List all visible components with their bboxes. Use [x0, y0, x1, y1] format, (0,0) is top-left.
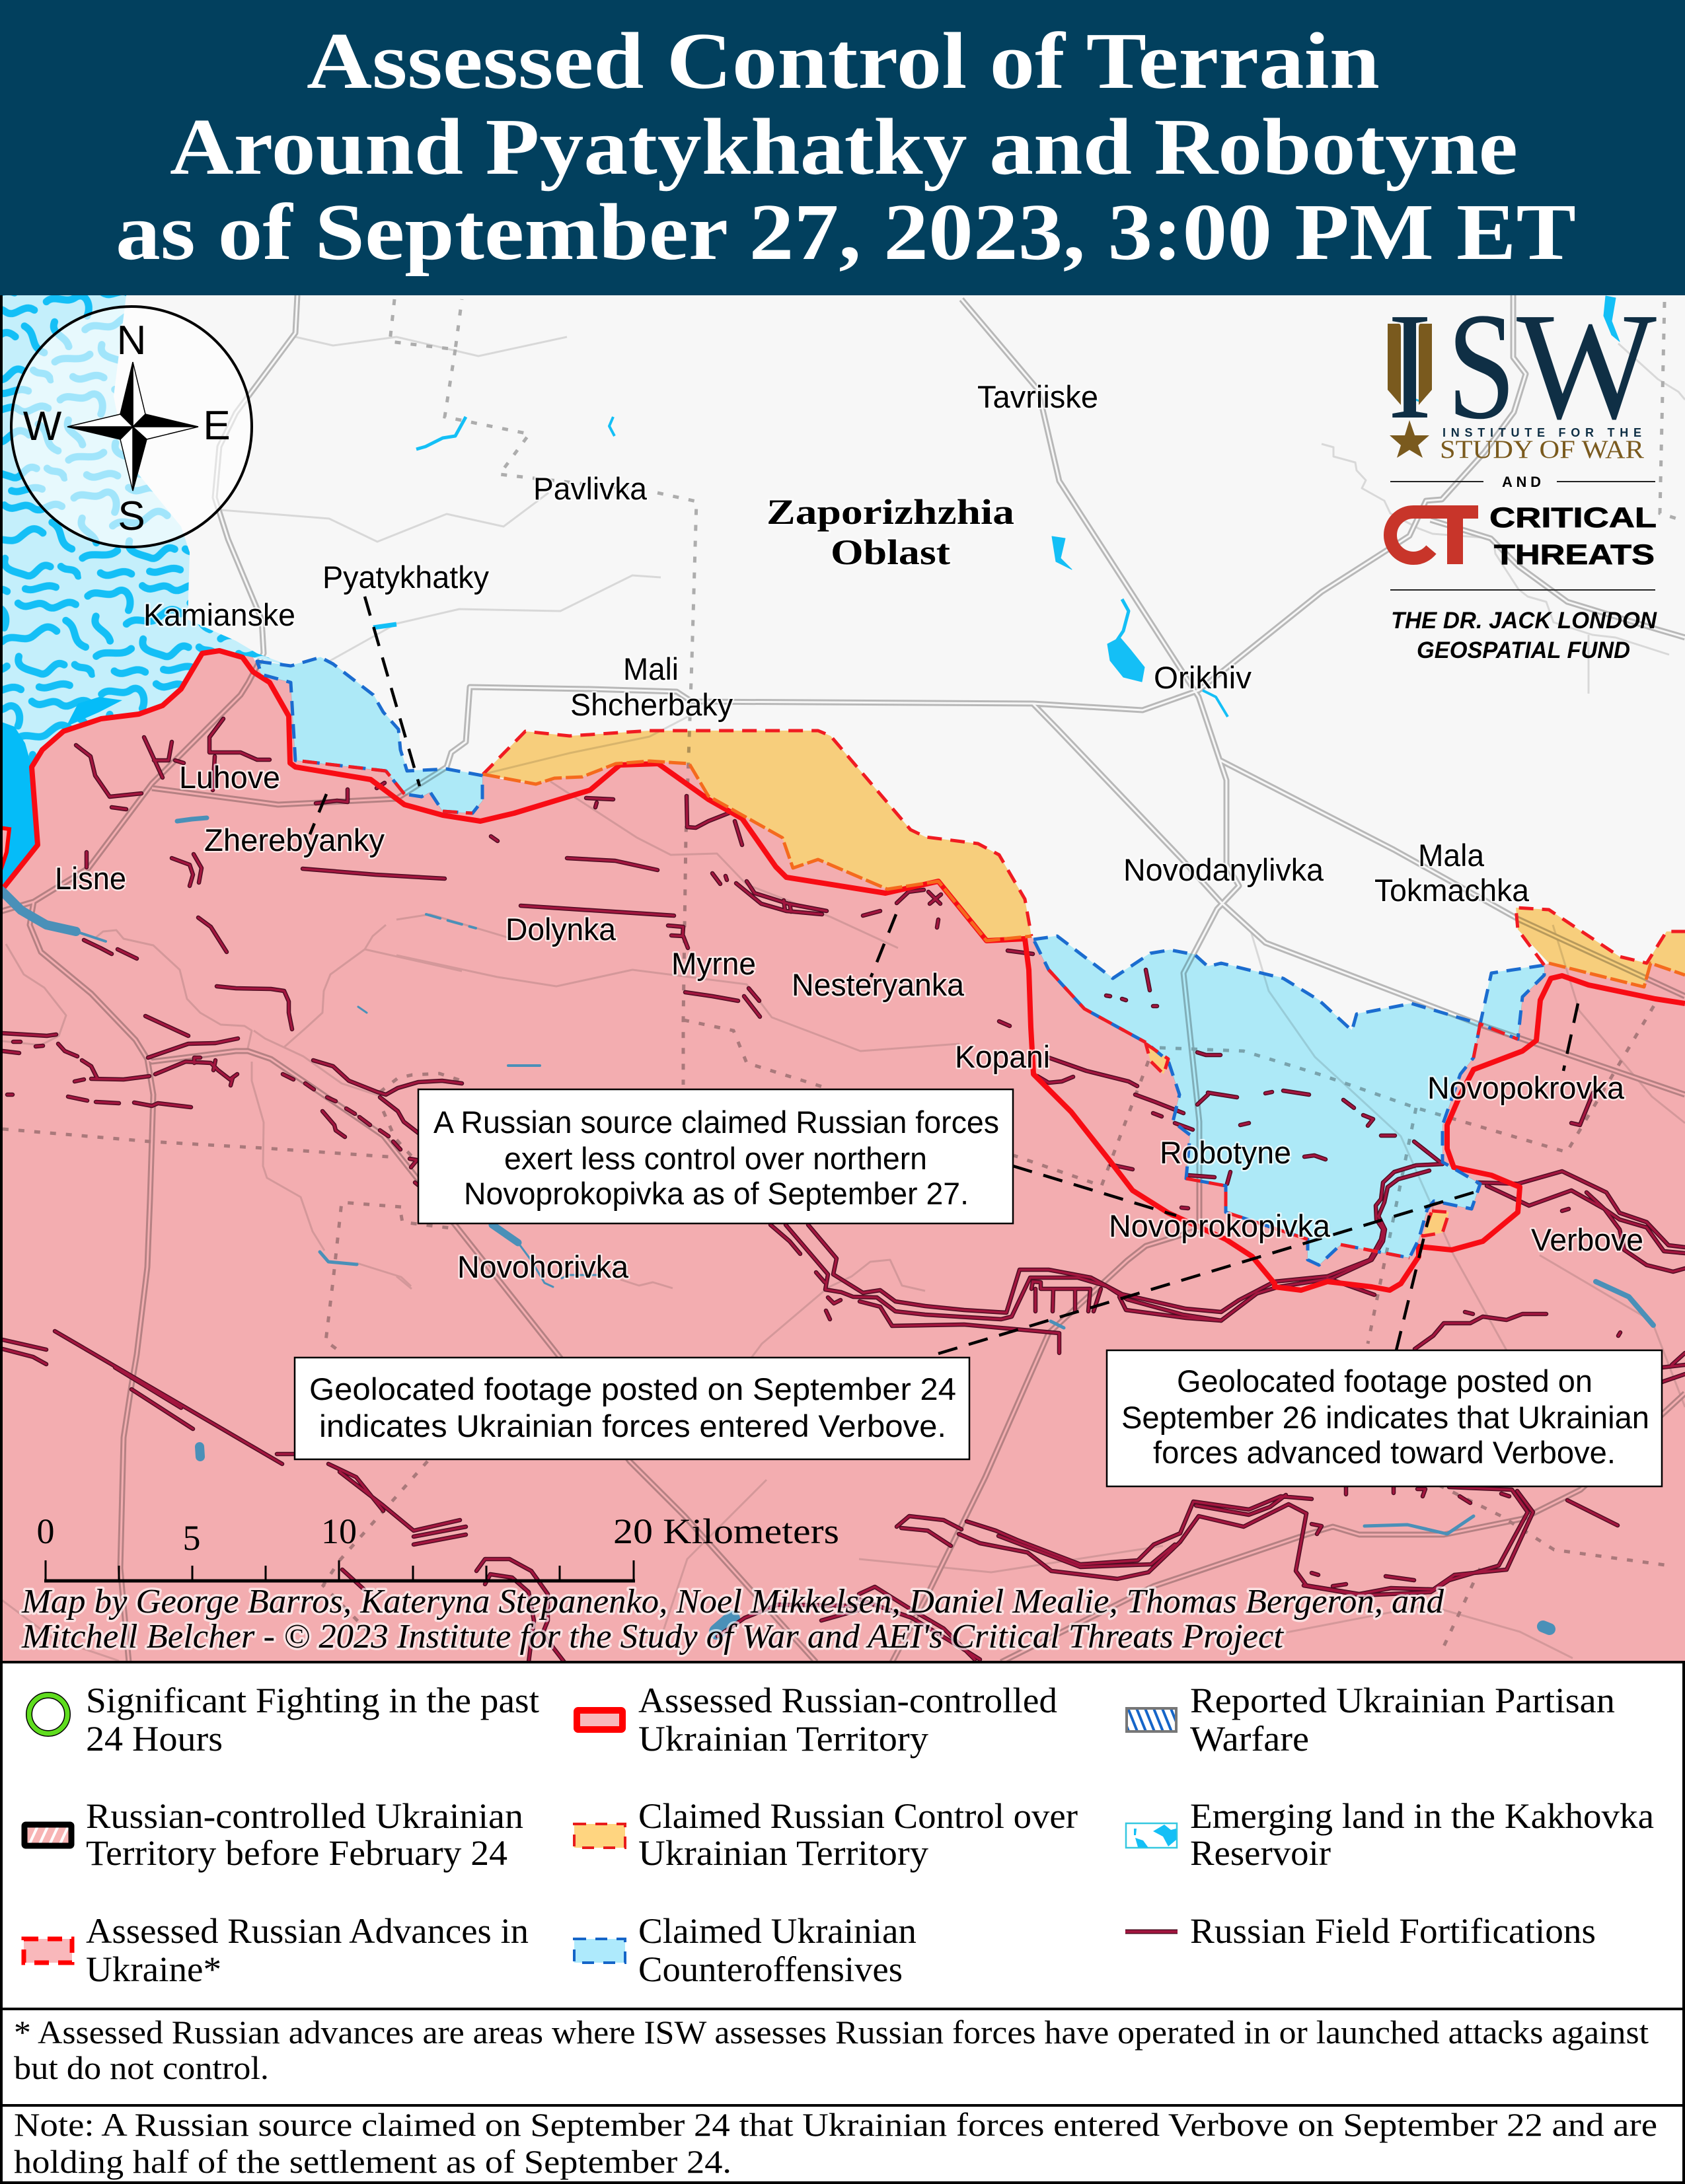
callout: September 26 footage: forces advanced toward Verbove. — [1153, 1435, 1616, 1470]
compass letters: N — [117, 318, 146, 363]
legend: partisan warfare — [1127, 1681, 1615, 1759]
institute text: STUDY OF WAR — [1440, 435, 1644, 464]
critical threats text — [1489, 502, 1657, 571]
legend: emerging land: Reservoir — [1190, 1833, 1331, 1873]
label: Luhove: Luhove — [179, 760, 280, 795]
label: Nesteryanka: Nesteryanka — [792, 967, 965, 1002]
label: Pyatykhatky: Pyatykhatky — [322, 560, 489, 595]
label: Novopokrovka: Novopokrovka — [1427, 1070, 1625, 1105]
footnote: * Assessed Russian advances are areas where ISW assesses Russian forces have operated in or launched attacks against — [14, 2014, 1649, 2051]
place labels — [55, 379, 1643, 1284]
label: Zherebyanky: Zherebyanky — [204, 822, 385, 857]
compass rose — [11, 307, 252, 547]
rural thin roads — [0, 337, 1685, 1661]
legend: assessed Russian advances: Ukraine* — [86, 1949, 221, 1989]
label: Novohorivka: Novohorivka — [457, 1249, 629, 1284]
legend: assessed Russian advances — [24, 1911, 529, 1989]
Russian field fortifications — [3, 719, 1685, 1662]
label: Kamianske: Kamianske — [143, 597, 295, 632]
label: Mala: Mala — [1418, 838, 1485, 873]
claimed Russian control areas — [483, 731, 1685, 1236]
note: Note: A Russian source claimed on September 24 that Ukrainian forces entered Verbove on September 22 and are — [14, 2106, 1657, 2143]
Russian-controlled territory — [0, 651, 1685, 1661]
water bodies and rivers — [373, 296, 1620, 717]
legend — [24, 1681, 1654, 1989]
critical threats text: CRITICAL — [1489, 502, 1657, 534]
ISW letters: W — [1516, 281, 1657, 451]
institute text: INSTITUTE FOR THE — [1442, 426, 1641, 439]
compass letters: E — [203, 403, 231, 449]
oblast label: Zaporizhzhia — [767, 492, 1014, 532]
label: Lisne: Lisne — [55, 861, 126, 896]
label: Dolynka: Dolynka — [506, 912, 617, 947]
legend: emerging land: Emerging land in the Kakhovka — [1190, 1796, 1654, 1836]
legend: partisan warfare: Reported Ukrainian Partisan — [1190, 1681, 1615, 1720]
label: Novodanylivka: Novodanylivka — [1123, 852, 1324, 887]
title: Assessed Control of Terrain — [307, 17, 1380, 106]
west bank Russian fragment — [0, 828, 9, 872]
claimed Russian edge dashes — [295, 731, 1685, 1258]
ISW letters — [1388, 281, 1657, 451]
legend: claimed Russian control: Claimed Russian Control over — [638, 1796, 1078, 1836]
legend: claimed Ukrainian counteroffensives — [574, 1911, 917, 1989]
legend: pre-2022 Russian control: Territory before February 24 — [86, 1833, 507, 1873]
water in occupied territory — [2, 818, 1653, 1632]
gold star — [1390, 420, 1429, 458]
map credits: Map by George Barros, Kateryna Stepanenko, Noel Mikkelsen, Daniel Mealie, Thomas Bergeron, and — [21, 1583, 1444, 1620]
legend: assessed Russian-controlled territory: Assessed Russian-controlled — [638, 1681, 1057, 1720]
title: Around Pyatykhatky and Robotyne — [170, 102, 1518, 192]
oblast label — [767, 492, 1014, 572]
and divider: AND — [1502, 474, 1541, 490]
institute text — [1440, 426, 1644, 464]
callout: September 24 footage: Geolocated footage posted on September 24 — [309, 1371, 956, 1406]
label: Shcherbaky: Shcherbaky — [570, 687, 733, 722]
label: Orikhiv: Orikhiv — [1154, 660, 1252, 695]
ISW letters: S — [1447, 281, 1516, 451]
legend: significant fighting — [29, 1681, 539, 1759]
scale numbers: 0 — [37, 1511, 54, 1551]
ISW letters: I — [1388, 281, 1432, 451]
legend: claimed Russian control — [574, 1796, 1078, 1873]
note: holding half of the settlement as of September 24. — [14, 2143, 731, 2180]
label: Novoprokopivka: Novoprokopivka — [1109, 1208, 1331, 1243]
legend: significant fighting: 24 Hours — [86, 1719, 223, 1759]
label: Robotyne: Robotyne — [1160, 1135, 1291, 1170]
legend: claimed Russian control: Ukrainian Territory — [638, 1833, 928, 1873]
legend: field fortifications: Russian Field Fortifications — [1190, 1911, 1596, 1951]
scale numbers: 5 — [182, 1518, 201, 1558]
map background — [0, 295, 1685, 1661]
fund text: THE DR. JACK LONDON — [1391, 608, 1657, 634]
title — [116, 17, 1576, 277]
legend: assessed Russian advances: Assessed Russian Advances in — [86, 1911, 529, 1951]
dotted boundaries — [3, 299, 1685, 1646]
leader lines — [310, 597, 1578, 1354]
callout: September 24 footage: indicates Ukrainian forces entered Verbove. — [319, 1408, 946, 1443]
label: Mali: Mali — [623, 651, 679, 686]
legend: claimed Ukrainian counteroffensives: Counteroffensives — [638, 1949, 903, 1989]
header band — [0, 0, 1685, 295]
label: Verbove: Verbove — [1531, 1222, 1643, 1257]
scale numbers — [37, 1511, 839, 1558]
callout: September 26 footage — [1107, 1350, 1662, 1486]
claimed Ukrainian edge dashes — [257, 657, 1544, 1265]
compass letters: S — [118, 493, 145, 539]
legend: pre-2022 Russian control — [24, 1796, 523, 1873]
callout: northern Novoprokopivka: A Russian source claimed Russian forces — [433, 1105, 999, 1140]
legend: assessed Russian-controlled territory: Ukrainian Territory — [638, 1719, 928, 1759]
label: Kopani: Kopani — [955, 1039, 1050, 1074]
label: Tavriiske: Tavriiske — [977, 379, 1098, 414]
compass letters — [23, 318, 231, 539]
logo: ISW and Critical Threats — [1388, 281, 1657, 663]
CT mark — [1390, 512, 1478, 564]
callout: September 26 footage: Geolocated footage posted on — [1177, 1364, 1592, 1399]
callout: northern Novoprokopivka — [418, 1089, 1013, 1223]
label: Tokmachka: Tokmachka — [1374, 873, 1530, 908]
Russian front line — [4, 651, 1685, 1290]
oblast label: Oblast — [831, 532, 950, 572]
map panel — [0, 281, 1685, 1662]
critical threats text: THREATS — [1494, 539, 1655, 571]
legend: partisan warfare: Warfare — [1190, 1719, 1309, 1759]
map credits — [21, 1583, 1444, 1656]
title: as of September 27, 2023, 3:00 PM ET — [116, 188, 1576, 277]
callout: September 26 footage: September 26 indicates that Ukrainian — [1121, 1400, 1649, 1435]
map credits: Mitchell Belcher - © 2023 Institute for the Study of War and AEI's Critical Threats Project — [21, 1618, 1285, 1656]
callout: September 24 footage — [295, 1358, 969, 1459]
legend: significant fighting: Significant Fighting in the past — [86, 1681, 539, 1720]
callout: northern Novoprokopivka: Novoprokopivka as of September 27. — [464, 1176, 969, 1211]
claimed Ukrainian counteroffensive areas — [257, 657, 1544, 1265]
footnote: but do not control. — [14, 2049, 269, 2086]
scale numbers: 10 — [321, 1511, 357, 1551]
scale bar — [37, 1511, 839, 1581]
legend: emerging land — [1126, 1796, 1654, 1873]
legend: claimed Ukrainian counteroffensives: Claimed Ukrainian — [638, 1911, 917, 1951]
fund text — [1391, 608, 1657, 663]
footnote — [14, 2014, 1649, 2086]
emerging land in the Kakhovka Reservoir — [0, 295, 291, 887]
legend: pre-2022 Russian control: Russian-controlled Ukrainian — [86, 1796, 523, 1836]
scale numbers: 20 Kilometers — [613, 1511, 839, 1551]
note — [14, 2106, 1657, 2180]
fund text: GEOSPATIAL FUND — [1417, 637, 1630, 663]
label: Myrne: Myrne — [671, 946, 756, 981]
label: Pavlivka: Pavlivka — [533, 471, 648, 506]
compass letters: W — [23, 404, 62, 449]
legend: assessed Russian-controlled territory — [577, 1681, 1057, 1759]
compass star — [67, 362, 198, 491]
callout: northern Novoprokopivka: exert less control over northern — [504, 1141, 927, 1176]
main roads — [0, 295, 1685, 1662]
